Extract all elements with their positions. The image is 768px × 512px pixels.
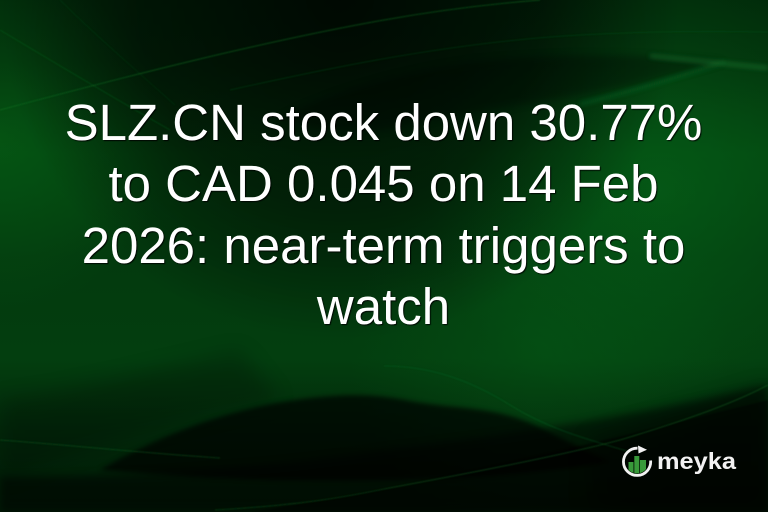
lower dark hump <box>100 395 610 481</box>
title: 2026: near-term triggers to <box>82 217 685 274</box>
wordmark: meyka <box>657 448 737 474</box>
title: to CAD 0.045 on 14 Feb <box>108 155 659 212</box>
title: SLZ.CN stock down 30.77% <box>65 94 702 151</box>
title: watch <box>317 278 450 335</box>
bottom dark strip <box>0 385 768 512</box>
lower left shade <box>0 350 280 480</box>
top dark band <box>280 55 725 132</box>
logo: meyka <box>622 446 737 477</box>
icon: ring with bars <box>623 446 651 476</box>
right lower fade <box>590 385 768 512</box>
title <box>65 94 702 335</box>
